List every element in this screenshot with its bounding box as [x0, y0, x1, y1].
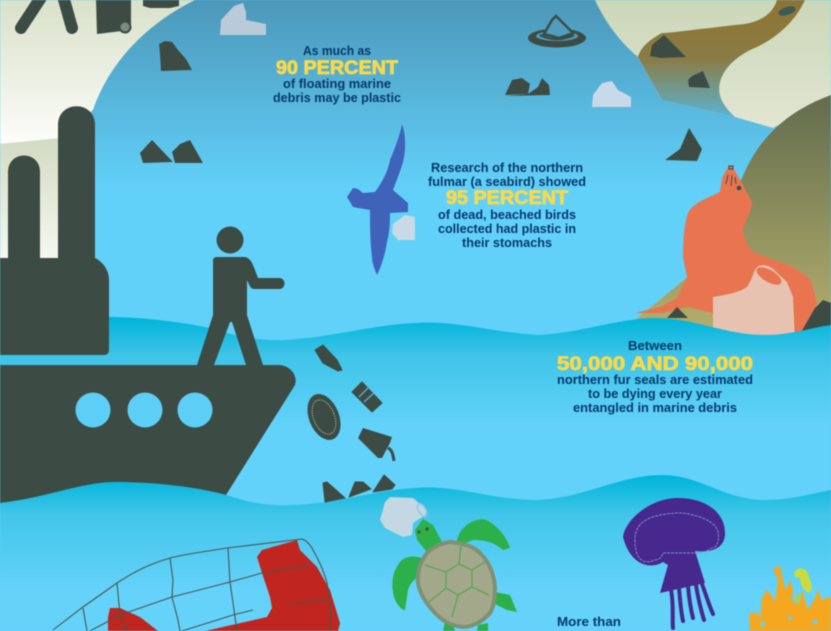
- text block: 95 percent: of dead, beached birds: [438, 208, 576, 222]
- wave band lower: [0, 475, 831, 631]
- text block: 95 percent: [428, 161, 586, 250]
- ship portholes: [76, 392, 212, 428]
- icon: orange coral: [749, 566, 831, 631]
- icon: plastic bag above turtle: [380, 497, 429, 537]
- floating debris: [140, 41, 702, 163]
- icon: seahorse: [794, 568, 812, 603]
- icon: bottle: [315, 345, 342, 371]
- text block: 90 percent: [273, 44, 401, 105]
- left shore land: [0, 0, 195, 258]
- icon: plastic bottle on seal: [713, 264, 795, 340]
- text block: fur seals: to be dying every year: [588, 387, 722, 401]
- text block: 95 percent: Research of the northern: [431, 161, 583, 175]
- right shore land with river: [595, 0, 831, 128]
- text block: 95 percent: their stomachs: [462, 236, 552, 250]
- ship cabin: [0, 258, 109, 355]
- icon: person with bin on shore: [21, 0, 179, 34]
- text block: fur seals: 50,000 AND 90,000: [557, 354, 753, 375]
- text block: fur seals: entangled in marine debris: [573, 401, 737, 415]
- text block: more than: More than: [557, 615, 621, 629]
- icon: floating ring debris: [528, 16, 586, 48]
- seal: [635, 166, 831, 340]
- icon: sea turtle: [392, 519, 517, 631]
- icon: plate: [301, 389, 347, 445]
- wave band upper: [0, 317, 831, 631]
- text block: 95 percent: fulmar (a seabird) showed: [428, 175, 586, 189]
- text block: fur seals: Between: [628, 339, 682, 353]
- falling plastic trash: [301, 345, 394, 461]
- text block: 95 percent: collected had plastic in: [438, 222, 576, 236]
- icon: can: [352, 382, 382, 412]
- text block: 90 percent: 90 PERCENT: [276, 58, 398, 79]
- icon: plastic bag top: [220, 3, 266, 35]
- icon: plastic bag right: [592, 81, 631, 107]
- text block: 90 percent: debris may be plastic: [273, 91, 401, 105]
- hill behind seal: [635, 95, 831, 340]
- text block: 90 percent: As much as: [303, 44, 371, 58]
- ship hull: [0, 365, 296, 510]
- text block: fur seals: [557, 339, 753, 415]
- text block: 95 percent: 95 PERCENT: [446, 188, 568, 209]
- ship funnels: [8, 106, 95, 265]
- sky gradient band: [0, 0, 831, 190]
- icon: jellyfish: [623, 498, 725, 628]
- icon: cup: [358, 428, 394, 461]
- text block: 90 percent: of floating marine: [283, 77, 391, 91]
- icon: seabird with bag: [347, 124, 415, 275]
- icon: ship: [0, 106, 296, 510]
- icon: person throwing trash: [197, 226, 284, 365]
- icon: debris pile on water line: [323, 475, 395, 502]
- icon: red debris in fishing net: [53, 539, 340, 631]
- text block: fur seals: northern fur seals are estimated: [557, 373, 753, 387]
